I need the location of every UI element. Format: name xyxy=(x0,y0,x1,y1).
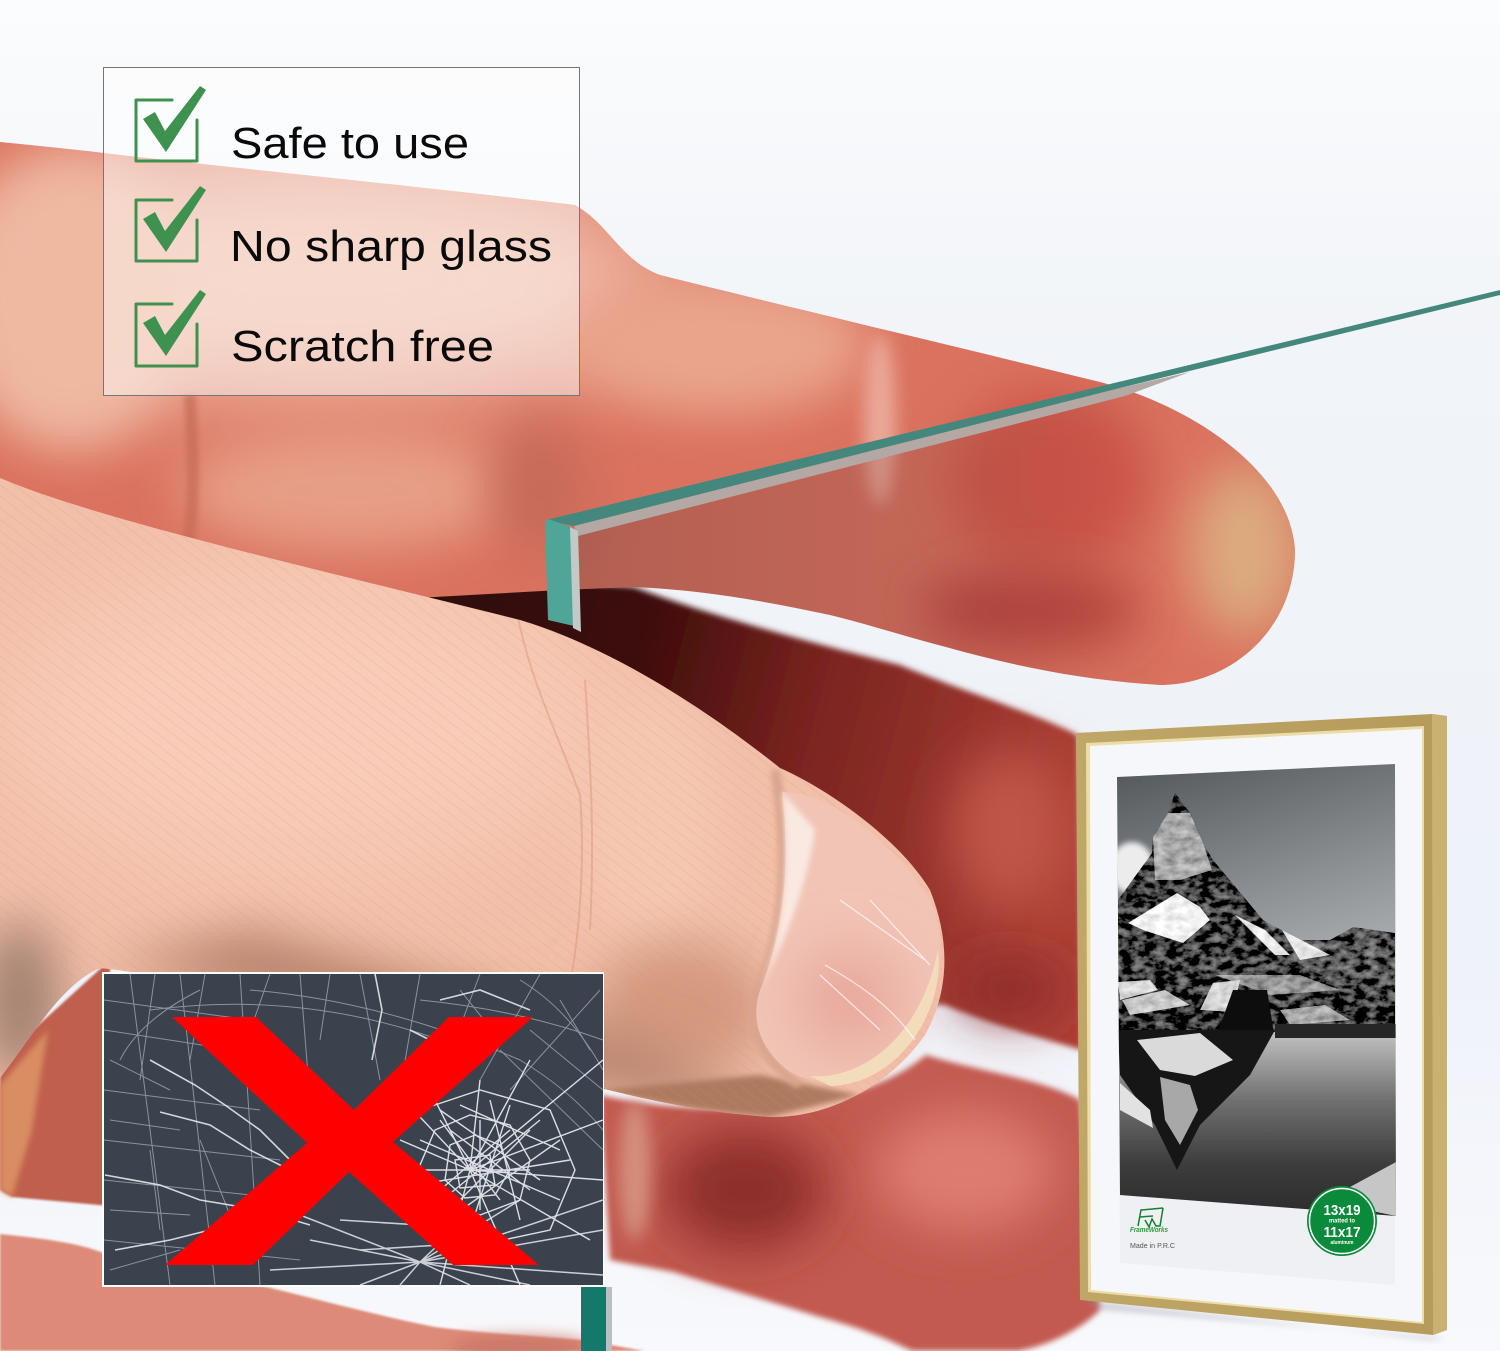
white mat xyxy=(1090,729,1422,1322)
icon: check box xyxy=(136,186,206,261)
reflection water xyxy=(1110,1032,1400,1222)
lower radial rays xyxy=(270,1200,603,1285)
size badge xyxy=(1307,1186,1377,1256)
crack lines xyxy=(104,974,603,1285)
skin creases xyxy=(518,617,592,985)
mountains and rocks xyxy=(1118,793,1395,1040)
size badge: matted to xyxy=(1329,1218,1355,1224)
broken glass photo with red X xyxy=(102,972,604,1287)
left knuckle wedge xyxy=(0,960,110,1206)
skin ridges xyxy=(0,470,960,1130)
thumbnail xyxy=(756,792,941,1086)
lower finger xyxy=(600,1055,1100,1351)
red X xyxy=(165,1017,539,1265)
glass bevel xyxy=(574,372,1190,536)
nail fold shading xyxy=(754,770,800,1085)
bottom finger xyxy=(0,1234,645,1351)
glass side edge xyxy=(545,519,574,626)
framed photograph xyxy=(1110,760,1400,1222)
glass tint over finger xyxy=(578,409,1080,676)
gold frame xyxy=(1076,714,1447,1335)
size badge: 11x17 xyxy=(1324,1224,1360,1241)
icon: check box xyxy=(136,290,206,366)
middle finger behind the glass xyxy=(250,556,1082,1050)
checklist panel xyxy=(104,68,580,396)
thumb xyxy=(0,470,960,1130)
size badge: aluminum xyxy=(1330,1240,1354,1246)
impact cluster xyxy=(400,1060,603,1285)
frame shadow xyxy=(1085,1300,1446,1340)
inner frame highlight xyxy=(1086,726,1424,1324)
FrameWorks logo: Made in P.R.C xyxy=(1130,1241,1176,1250)
FrameWorks logo: FrameWorks xyxy=(1130,1225,1168,1234)
item: Scratch free: Scratch free xyxy=(231,322,494,371)
item: Safe to use xyxy=(136,86,469,168)
cloud xyxy=(1118,838,1152,895)
icon: check box xyxy=(136,86,206,161)
FrameWorks logo xyxy=(1130,1208,1176,1250)
item: Safe to use: Safe to use xyxy=(231,119,469,168)
glass bottom edge xyxy=(581,1287,612,1351)
glass pane xyxy=(545,290,1500,1351)
inner mat xyxy=(1117,764,1395,1285)
size badge: 13x19 xyxy=(1324,1202,1360,1219)
index finger xyxy=(0,130,1310,700)
photo frame product xyxy=(1076,714,1447,1340)
glass top edge xyxy=(546,290,1500,526)
item: Scratch free xyxy=(136,290,494,371)
item: No sharp glass: No sharp glass xyxy=(230,222,552,271)
foreground stone xyxy=(1350,1162,1396,1216)
item: No sharp glass xyxy=(136,186,552,271)
